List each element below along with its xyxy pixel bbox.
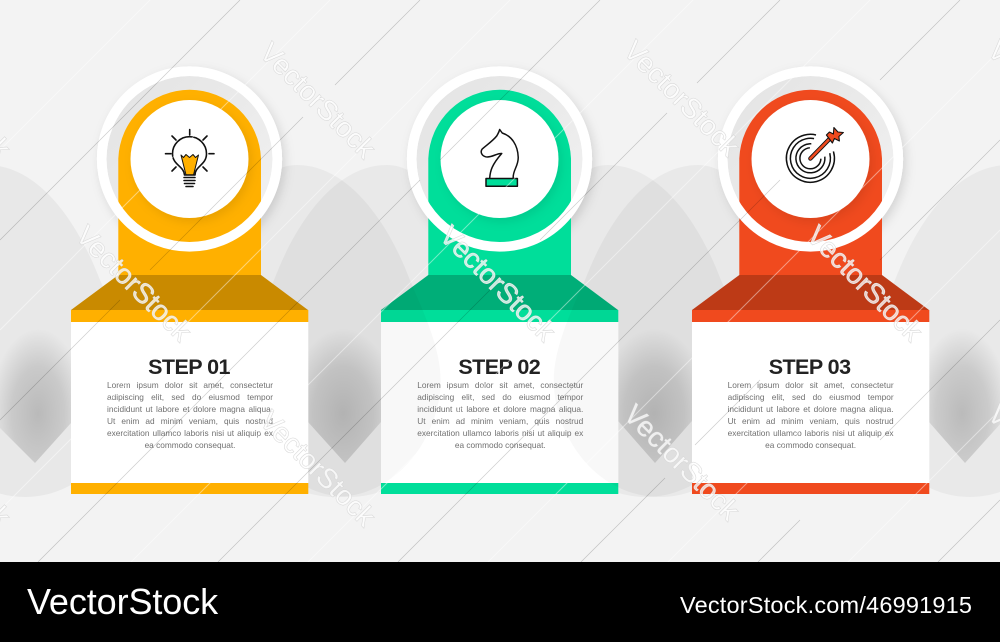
footer bar xyxy=(0,562,1000,642)
text block: step 03: incididunt ut labore et dolore magna aliqua. xyxy=(728,404,894,414)
panel: step 01 xyxy=(71,66,308,494)
watermark overlay: VectorStock xyxy=(254,405,382,533)
text block: step 02: Ut enim ad minim veniam, quis nostrud xyxy=(417,416,583,426)
text block: step 03: exercitation ullamco laboris nisi ut aliquip ex xyxy=(728,428,894,438)
text block: step 01: ea commodo consequat. xyxy=(145,440,235,450)
watermark overlay: VectorStock xyxy=(618,35,746,163)
text block: step 02: ea commodo consequat. xyxy=(455,440,546,450)
icon: light bulb xyxy=(166,130,214,186)
icon: target with arrow xyxy=(781,128,843,188)
panel: step 02 xyxy=(381,66,618,494)
text block: step 01 xyxy=(107,380,273,450)
watermark overlay: VectorStock xyxy=(618,399,746,527)
text block: step 02: Lorem ipsum dolor sit amet, consectetur xyxy=(417,380,583,390)
panel: step 03 xyxy=(692,66,930,494)
heading: step 03: STEP 03 xyxy=(769,355,850,379)
watermark overlay: VectorStock xyxy=(254,37,382,165)
heading: step 02: STEP 02 xyxy=(458,355,540,379)
watermark overlay: VectorStock xyxy=(801,220,929,348)
text block: step 01: Ut enim ad minim veniam, quis nostrud xyxy=(107,416,273,426)
text block: step 03: Ut enim ad minim veniam, quis nostrud xyxy=(728,416,894,426)
text block: step 01: Lorem ipsum dolor sit amet, consectetur xyxy=(107,380,273,390)
text block: step 01: exercitation ullamco laboris nisi ut aliquip ex xyxy=(107,428,273,438)
text block: step 03 xyxy=(728,380,894,450)
footer brand: VectorStock xyxy=(27,580,218,622)
footer url: VectorStock.com/46991915 xyxy=(680,592,972,618)
text block: step 02: incididunt ut labore et dolore magna aliqua. xyxy=(417,404,583,414)
text block: step 02: exercitation ullamco laboris nisi ut aliquip ex xyxy=(417,428,583,438)
text block: step 02: adipiscing elit, sed do eiusmod tempor xyxy=(417,392,583,402)
watermark overlay: VectorStock xyxy=(434,220,562,348)
watermark overlay: VectorStock xyxy=(70,220,198,348)
text block: step 03: Lorem ipsum dolor sit amet, consectetur xyxy=(728,380,894,390)
text block: step 01: adipiscing elit, sed do eiusmod tempor xyxy=(107,392,273,402)
text block: step 03: adipiscing elit, sed do eiusmod tempor xyxy=(728,392,894,402)
icon: chess knight xyxy=(482,130,519,186)
heading: step 01: STEP 01 xyxy=(148,355,230,379)
background shapes xyxy=(0,165,1000,497)
text block: step 03: ea commodo consequat. xyxy=(765,440,856,450)
text block: step 01: incididunt ut labore et dolore magna aliqua. xyxy=(107,404,273,414)
text block: step 02 xyxy=(417,380,584,450)
